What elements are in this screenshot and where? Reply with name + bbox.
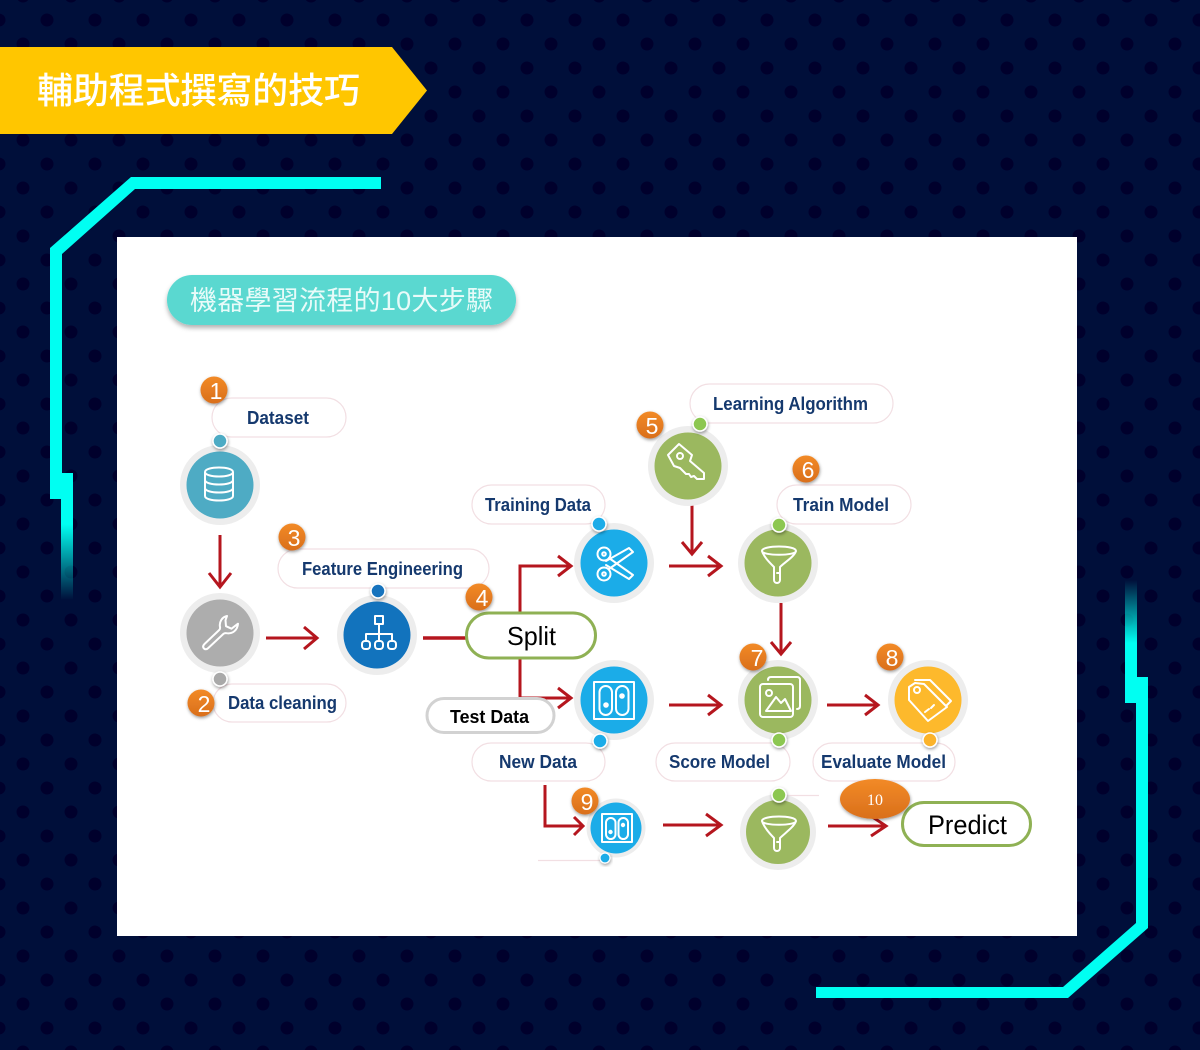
frame: top-left cyan bracket	[50, 177, 381, 600]
node: scissors icon	[574, 523, 654, 603]
badge: step 3	[278, 524, 306, 551]
connector dot: training data	[592, 517, 606, 531]
connector dot: evaluate model	[923, 733, 937, 747]
icon: scissors	[606, 548, 633, 579]
node: train model funnel	[738, 523, 818, 603]
icon: price tags	[909, 680, 951, 721]
frame: bottom-right cyan bracket	[816, 580, 1148, 998]
badge: step 1	[200, 376, 228, 404]
decorative leader lines	[538, 796, 819, 860]
node: evaluate model tag	[888, 660, 968, 740]
icon: wrench	[203, 616, 238, 649]
box: Predict: Predict	[928, 810, 1007, 840]
badge: step 4: 4	[476, 585, 489, 611]
label: Score Model	[656, 743, 790, 781]
icon: switches	[594, 682, 634, 719]
arrow: split to test data	[520, 658, 571, 708]
arrow: step nine to final model	[663, 814, 721, 836]
connector dot: new data	[593, 734, 607, 748]
box: Test Data	[427, 698, 554, 732]
arrow: learning algorithm to train model	[682, 503, 702, 554]
badge: step 5: 5	[646, 413, 658, 439]
connector dot: dataset	[213, 434, 227, 448]
arrow: train model to score model	[771, 603, 791, 654]
node: step nine switches	[586, 798, 646, 858]
connector dot: train model	[772, 518, 786, 532]
node: key icon	[648, 426, 728, 506]
arrow: split to training data	[520, 556, 571, 613]
label: Dataset	[212, 398, 346, 437]
icon: small switches	[602, 814, 632, 842]
badge: step 2	[188, 690, 214, 717]
label: Data cleaning	[213, 684, 346, 722]
icon: funnel	[762, 816, 796, 851]
box: Predict	[902, 802, 1030, 846]
label: New Data	[472, 743, 605, 781]
icon: funnel	[762, 546, 796, 583]
box: Test Data: Test Data	[450, 707, 530, 727]
node: dataset icon	[180, 445, 260, 525]
badge: step 9	[572, 788, 598, 815]
badge: step 4	[466, 584, 492, 611]
badge: step 8: 8	[886, 645, 898, 671]
badge: step 9: 9	[581, 789, 593, 815]
label: Train Model: Train Model	[793, 495, 889, 515]
label: Evaluate Model: Evaluate Model	[821, 752, 946, 772]
badge: step 1: 1	[210, 378, 222, 404]
badge: step 6	[792, 456, 820, 483]
connector dot: step nine	[600, 853, 610, 863]
node: final funnel	[740, 794, 816, 870]
box: Split	[466, 613, 596, 658]
icon: hierarchy	[366, 616, 392, 640]
badge: step 8	[876, 644, 904, 671]
badge: step 2: 2	[198, 691, 210, 717]
heading: ten steps pill	[167, 275, 516, 325]
label: Feature Engineering: Feature Engineering	[302, 559, 463, 579]
node: hierarchy icon	[337, 595, 417, 675]
badge: step 6: 6	[802, 457, 814, 483]
label: Learning Algorithm: Learning Algorithm	[713, 394, 868, 414]
icon: database	[205, 468, 233, 500]
connector: feature engineering to split	[423, 636, 467, 640]
arrow: test data to score model	[669, 695, 721, 715]
badge: step 5	[636, 412, 664, 439]
label: Train Model	[777, 485, 911, 524]
connector dot: score model	[772, 733, 786, 747]
node: score model image	[738, 660, 818, 740]
arrow: dataset to data cleaning	[209, 535, 231, 587]
node: test data switches	[574, 660, 654, 740]
badge: step 3: 3	[288, 525, 300, 551]
arrow: training data to train model	[669, 556, 721, 576]
label: Feature Engineering	[278, 549, 489, 588]
arrow: data cleaning to feature engineering	[266, 627, 317, 649]
badge: step 7	[740, 644, 766, 671]
label: Evaluate Model	[813, 743, 955, 781]
label: Learning Algorithm	[690, 384, 893, 423]
title banner: 輔助程式撰寫的技巧	[37, 70, 360, 111]
connector dot: final funnel	[772, 788, 786, 802]
node: wrench icon	[180, 593, 260, 673]
badge: step 7: 7	[751, 645, 763, 671]
label: Training Data	[472, 485, 605, 524]
arrow: score model to evaluate model	[827, 695, 878, 715]
connector dot: data cleaning	[213, 672, 227, 686]
arrow: new data to step nine	[545, 785, 583, 835]
panel: white flow diagram card	[117, 237, 1077, 936]
icon: key	[668, 444, 704, 479]
label: Training Data: Training Data	[485, 495, 592, 515]
connector dot: feature engineering	[371, 584, 385, 598]
badge: step 10	[840, 779, 910, 819]
heading: ten steps pill: 機器學習流程的10大步驟	[190, 286, 493, 316]
title banner	[0, 47, 427, 134]
icon: pictures	[760, 684, 793, 717]
box: Split: Split	[507, 621, 557, 651]
connector dot: learning algorithm	[693, 417, 707, 431]
arrow: final model to predict	[828, 816, 886, 836]
label: New Data: New Data	[499, 752, 578, 772]
label: Dataset: Dataset	[247, 408, 309, 428]
label: Score Model: Score Model	[669, 752, 770, 772]
label: Data cleaning: Data cleaning	[228, 693, 337, 713]
badge: step 10: 10	[867, 792, 883, 809]
